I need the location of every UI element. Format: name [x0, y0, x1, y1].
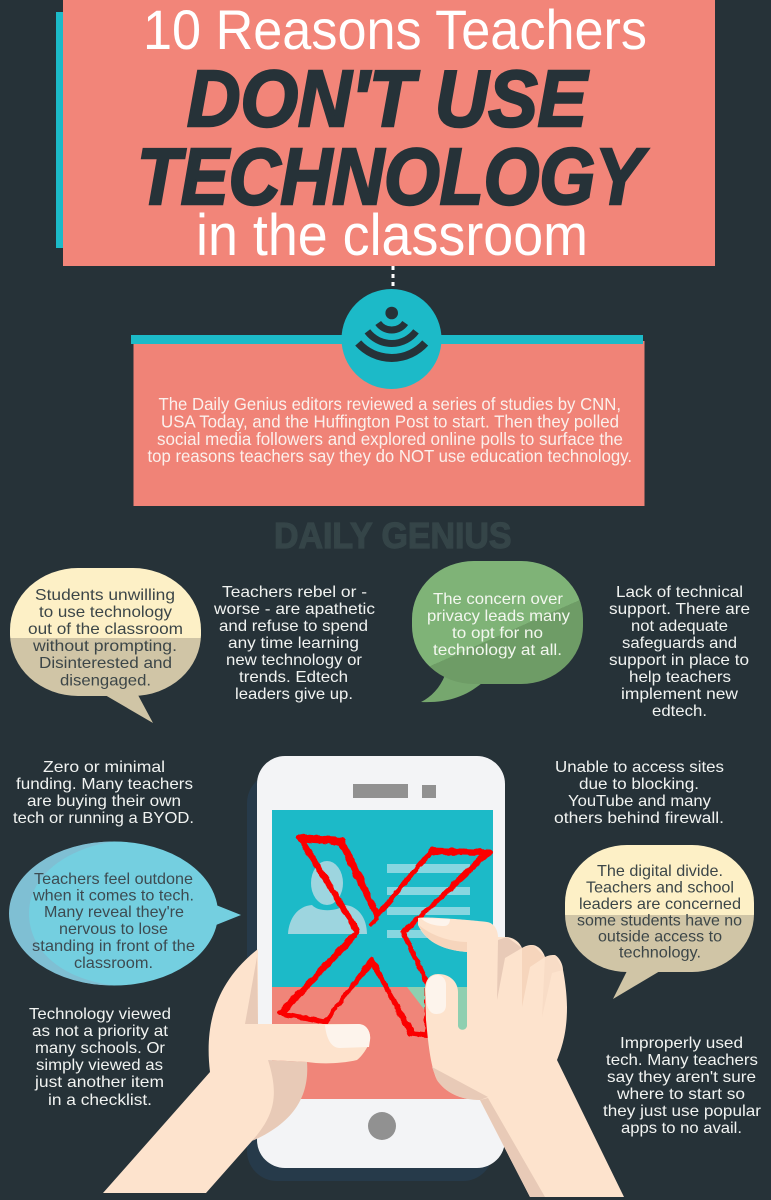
- text: improperly used tech: Improperly used: [620, 1035, 743, 1052]
- bubble text: privacy leads many: [427, 608, 570, 625]
- text: lack of technical support: not adequate: [631, 618, 728, 635]
- bubble text: when it comes to tech.: [32, 888, 194, 904]
- intro panel: [131, 289, 644, 506]
- text: technology not a priority: in a checklist.: [48, 1092, 152, 1109]
- text: teachers rebel: Teachers rebel or -: [222, 584, 367, 601]
- text: improperly used tech: where to start so: [616, 1086, 745, 1103]
- text: teachers rebel: any time learning: [228, 635, 359, 652]
- text: teachers rebel: leaders give up.: [235, 686, 353, 703]
- text: unable to access sites: others behind firewall.: [554, 810, 724, 827]
- text lines placeholder: [387, 864, 470, 938]
- text: zero funding: Zero or minimal: [43, 759, 165, 776]
- title line 3: TECHNOLOGY: [137, 132, 649, 221]
- bubble text: to use technology: [39, 604, 172, 621]
- bubble text: disengaged.: [60, 672, 151, 690]
- text: teachers rebel: [213, 584, 375, 703]
- camera: [422, 785, 436, 798]
- phone body: [257, 756, 505, 1168]
- bubble text: [32, 871, 195, 972]
- text: unable to access sites: [554, 759, 724, 827]
- text: teachers rebel: new technology or: [226, 652, 363, 669]
- home button: [368, 1112, 396, 1140]
- intro background: [134, 341, 644, 506]
- text: lack of technical support: edtech.: [652, 703, 707, 720]
- text: improperly used tech: [603, 1035, 762, 1137]
- bubble text: classroom.: [74, 955, 153, 972]
- text: lack of technical support: [609, 584, 750, 720]
- red X scrawl: [280, 837, 490, 1035]
- bubble text: The digital divide.: [597, 863, 723, 880]
- icon: person: [288, 861, 367, 934]
- text: teachers rebel: trends. Edtech: [239, 669, 348, 686]
- text: unable to access sites: YouTube and many: [568, 793, 711, 810]
- bubble text: to opt for no: [452, 625, 543, 642]
- text: technology not a priority: many schools. Or: [35, 1040, 166, 1057]
- bubble text: out of the classroom: [28, 621, 183, 638]
- text: lack of technical support: safeguards and: [622, 635, 737, 652]
- intro text: social media followers and explored online polls to surface the: [157, 429, 623, 449]
- text: technology not a priority: simply viewed as: [36, 1057, 163, 1074]
- text: teachers rebel: and refuse to spend: [219, 618, 368, 635]
- bubble text: Disinterested and: [39, 655, 172, 672]
- bubble text: standing in front of the: [32, 938, 195, 955]
- text: zero funding: tech or running a BYOD.: [13, 810, 194, 827]
- text: teachers rebel: worse - are apathetic: [213, 601, 375, 618]
- bubble text: Teachers feel outdone: [34, 871, 193, 888]
- intro text: USA Today, and the Huffington Post to start. Then they polled: [161, 412, 619, 432]
- bubble text: [28, 587, 183, 690]
- text: lack of technical support: support. There are: [609, 601, 750, 618]
- bubble text: technology.: [619, 944, 701, 962]
- teal divider bar: [131, 335, 643, 344]
- text: zero funding: funding. Many teachers: [16, 776, 193, 793]
- text: lack of technical support: support in place to: [609, 652, 749, 669]
- bubble text: The concern over: [433, 591, 564, 608]
- bubble text: Teachers and school: [586, 880, 734, 896]
- text: improperly used tech: tech. Many teachers: [606, 1052, 758, 1069]
- bubble text: [427, 591, 570, 659]
- bubble text: outside access to: [598, 928, 722, 946]
- bubble text: technology at all.: [433, 642, 562, 659]
- left hand: [103, 949, 370, 1193]
- speech bubble: privacy: [412, 561, 583, 702]
- text: technology not a priority: [29, 1006, 171, 1109]
- text: unable to access sites: due to blocking.: [579, 776, 699, 793]
- bubble text: Students unwilling: [35, 587, 175, 604]
- text: improperly used tech: say they aren't sure: [607, 1069, 756, 1086]
- text: lack of technical support: help teachers: [629, 669, 731, 686]
- title line 2: DON'T USE: [187, 54, 589, 143]
- bubble text: some students have no: [577, 912, 742, 930]
- text: zero funding: [13, 759, 194, 827]
- phone shadow: [247, 773, 493, 1181]
- teal accent bar: [56, 12, 64, 248]
- text: technology not a priority: as not a priority at: [32, 1023, 169, 1040]
- text: lack of technical support: Lack of technical: [616, 584, 743, 601]
- bubble text: leaders are concerned: [579, 896, 741, 913]
- screen: [272, 810, 493, 1099]
- text: zero funding: are buying their own: [27, 793, 181, 810]
- speech bubble: digital divide: [565, 845, 754, 999]
- title panel: [56, 0, 715, 268]
- dotted connector: [392, 266, 394, 292]
- bubble text: nervous to lose: [59, 921, 168, 938]
- illustration: phone and hands: [103, 756, 624, 1197]
- intro text: top reasons teachers say they do NOT use education technology.: [148, 446, 632, 466]
- bubble text: Many reveal they're: [44, 904, 184, 921]
- text: improperly used tech: they just use popular: [603, 1103, 762, 1120]
- text: unable to access sites: Unable to access sites: [555, 759, 724, 776]
- logo: Daily Genius: DAILY GENIUS: [274, 515, 512, 556]
- fingernail: thumb: [426, 975, 446, 1014]
- speech bubble: outdone: [9, 842, 241, 986]
- text: technology not a priority: just another item: [34, 1074, 164, 1091]
- title line 4: in the classroom: [196, 203, 588, 268]
- thumbnail: [325, 1024, 370, 1048]
- speaker: [353, 784, 408, 798]
- intro text: [148, 394, 632, 466]
- icon: wifi signal: [342, 289, 442, 389]
- title background: [63, 0, 715, 266]
- text: lack of technical support: implement new: [621, 686, 738, 703]
- bubble text: [577, 863, 742, 962]
- speech bubble: students unwilling: [10, 568, 201, 723]
- finger shading: [497, 937, 522, 1000]
- text: improperly used tech: apps to no avail.: [621, 1120, 742, 1137]
- text: technology not a priority: Technology viewed: [29, 1006, 171, 1023]
- intro text: The Daily Genius editors reviewed a series of studies by CNN,: [158, 394, 621, 414]
- bubble text: without prompting.: [32, 638, 177, 655]
- fingernail: index: [421, 918, 450, 926]
- right hand: [418, 918, 624, 1197]
